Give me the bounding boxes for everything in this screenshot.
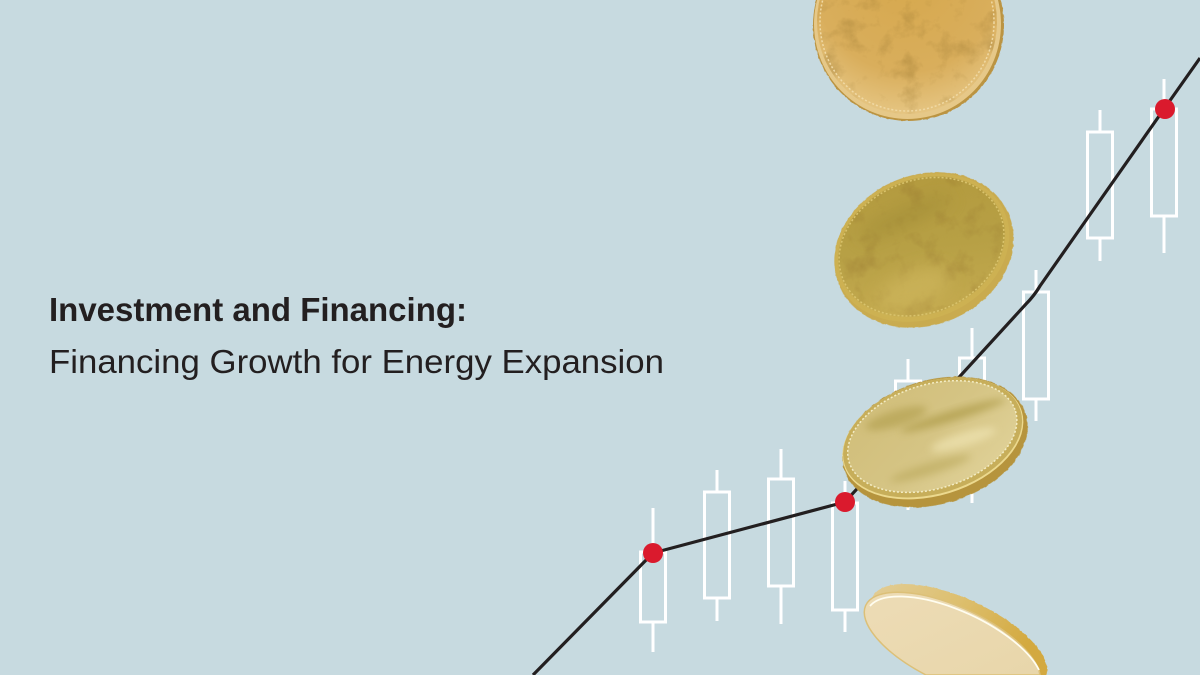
candle 8	[1088, 110, 1112, 261]
candle 1	[640, 508, 666, 652]
candle 6	[960, 328, 984, 503]
trend line	[533, 58, 1200, 675]
red marker 1	[643, 543, 663, 563]
candle 2	[704, 470, 730, 621]
coin 3	[826, 355, 1044, 529]
red marker 3	[1155, 99, 1175, 119]
title block	[49, 291, 664, 380]
candle 7	[1024, 270, 1048, 421]
candle 5	[896, 359, 920, 510]
coin 2	[810, 145, 1038, 355]
candle 3	[768, 449, 794, 624]
red marker 2	[835, 492, 855, 512]
heading: Investment and Financing:	[49, 291, 467, 328]
candle 9	[1152, 79, 1176, 253]
candlestick chart	[640, 79, 1176, 652]
coin 1	[813, 0, 1004, 121]
candle 4	[832, 481, 858, 632]
coin 4	[864, 584, 1047, 675]
subheading: Financing Growth for Energy Expansion	[49, 343, 664, 380]
